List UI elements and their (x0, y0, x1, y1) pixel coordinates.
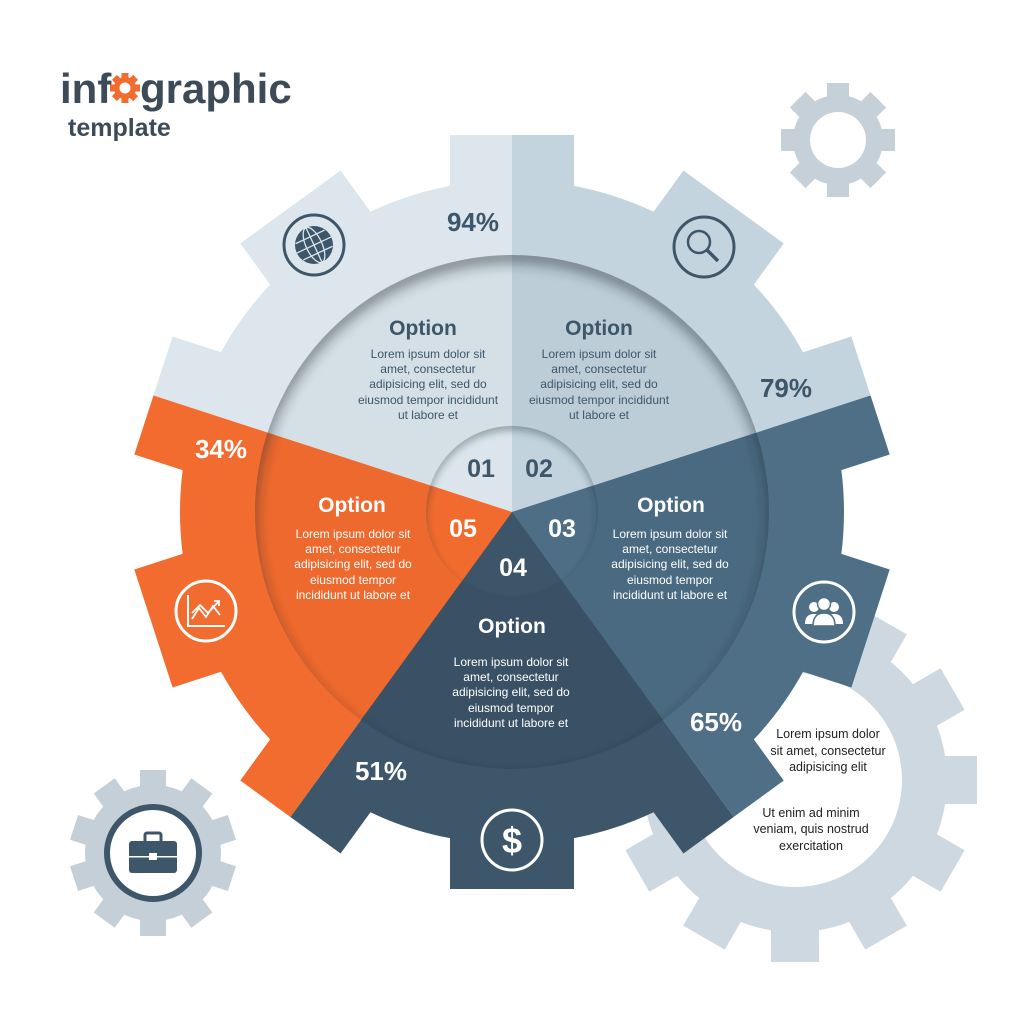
gear: bottom-right large with text (613, 598, 977, 962)
text block: option 01: adipisicing elit, sed do (369, 377, 487, 391)
icon: dollar: $ (502, 820, 522, 861)
text block: option 05: amet, consectetur (305, 542, 401, 556)
icon: dollar (482, 810, 542, 870)
icon: briefcase (129, 833, 177, 873)
text block: option 03: Lorem ipsum dolor sit (613, 527, 728, 541)
text block: option 04: Lorem ipsum dolor sit (454, 655, 569, 669)
numbers (449, 455, 576, 582)
panel: segment 03 outer (562, 396, 890, 817)
text block: option 01: ut labore et (398, 408, 459, 422)
text block: option 04: adipisicing elit, sed do (452, 685, 570, 699)
callout text 2: exercitation (779, 839, 843, 853)
text block: option 02 (529, 317, 670, 422)
title: inf (60, 65, 112, 112)
text block: option 02: eiusmod tempor incididunt (529, 393, 670, 407)
text block: option 04: amet, consectetur (463, 670, 559, 684)
text block: option 01: eiusmod tempor incididunt (358, 393, 499, 407)
title: template (68, 114, 171, 142)
percentages: 65% (690, 707, 742, 737)
icon: people (794, 582, 854, 642)
text block: option 03 (611, 494, 729, 602)
callout text 1: Lorem ipsum dolor (776, 727, 880, 741)
icon: globe (284, 215, 344, 275)
callout text 1: sit amet, consectetur (770, 744, 886, 758)
panel: segment 01 outer (154, 135, 512, 432)
percentages: 34% (195, 434, 247, 464)
text block: option 05: adipisicing elit, sed do (294, 557, 412, 571)
text block: option 01 (358, 317, 499, 422)
panel: segment 05 outer (134, 396, 462, 817)
text block: option 04: incididunt ut labore et (454, 716, 569, 730)
text block: option 02: ut labore et (569, 408, 630, 422)
gear: top-right small decorative (781, 83, 895, 197)
text block: option 05: Option (318, 494, 386, 517)
text block: option 05: incididunt ut labore et (296, 588, 411, 602)
callout text 1: adipisicing elit (789, 760, 867, 774)
percentages: 51% (355, 756, 407, 786)
numbers: 05 (449, 515, 477, 543)
text block: option 05: Lorem ipsum dolor sit (296, 527, 411, 541)
main gear (134, 135, 890, 889)
icon: orange gear letter o (110, 73, 140, 103)
callout text 2: veniam, quis nostrud (753, 822, 869, 836)
text block: option 04 (452, 615, 570, 730)
text block: option 03: adipisicing elit, sed do (611, 557, 729, 571)
text block: option 02: Option (565, 317, 633, 340)
percentages: 94% (447, 207, 499, 237)
numbers: 02 (525, 455, 553, 483)
text block: option 05: eiusmod tempor (310, 573, 396, 587)
panel: segment 02 outer (512, 135, 870, 432)
icon: chart (176, 581, 236, 641)
center circle (426, 426, 598, 582)
text block: option 02: amet, consectetur (551, 362, 647, 376)
text block: option 01: amet, consectetur (380, 362, 476, 376)
percentages (195, 207, 812, 786)
text block: option 04: eiusmod tempor (468, 701, 554, 715)
numbers: 01 (467, 455, 495, 483)
text block: option 02: Lorem ipsum dolor sit (542, 347, 657, 361)
text block: option 03: incididunt ut labore et (613, 588, 728, 602)
text block: option 04: Option (478, 615, 546, 638)
text block: option 02: adipisicing elit, sed do (540, 377, 658, 391)
text block: option 01: Lorem ipsum dolor sit (371, 347, 486, 361)
text block: option 01: Option (389, 317, 457, 340)
numbers: 04 (499, 554, 527, 582)
text block: option 05 (294, 494, 412, 602)
gear: bottom-left with briefcase (70, 770, 236, 936)
text block: option 03: Option (637, 494, 705, 517)
icon: magnifier (674, 217, 734, 277)
percentages: 79% (760, 373, 812, 403)
numbers: 03 (548, 515, 576, 543)
inner ring (249, 255, 775, 782)
callout text 2: Ut enim ad minim (762, 806, 860, 820)
title (60, 65, 292, 142)
text block: option 03: eiusmod tempor (627, 573, 713, 587)
text block: option 03: amet, consectetur (622, 542, 718, 556)
panel: segment 04 outer (290, 582, 734, 889)
title: graphic (140, 65, 292, 112)
